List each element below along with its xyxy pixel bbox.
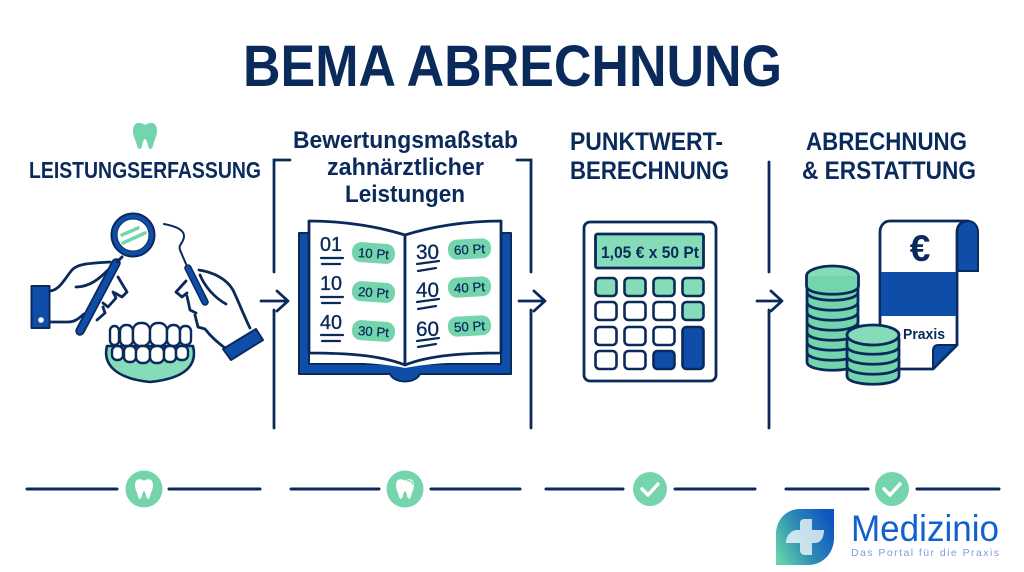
heading: Punktwert-Berechnung: PUNKTWERT- [570, 128, 723, 156]
left page [309, 221, 405, 365]
icon: top tooth [133, 123, 157, 149]
mirror handle [80, 257, 122, 331]
heading: Bewertungsmaßstab: zahnärztlicher [327, 154, 484, 181]
euro sign: € [910, 228, 930, 269]
icon: invoice with coins [806, 221, 978, 384]
point labels: 20 Pt [357, 284, 390, 301]
heading: Leistungserfassung: LEISTUNGSERFASSUNG [29, 157, 261, 183]
logo tagline: Das Portal für die Praxis [851, 547, 999, 559]
icon: calculator [584, 222, 716, 381]
point labels [357, 241, 486, 340]
invoice curl [957, 221, 978, 271]
left codes: 10 [320, 273, 342, 295]
probe [164, 224, 186, 264]
heading: Punktwert-Berechnung [570, 128, 729, 185]
right page [405, 221, 501, 365]
right cuff [223, 329, 263, 360]
page block [311, 354, 499, 368]
left codes: 01 [320, 234, 342, 256]
heading: Abrechnung und Erstattung [802, 128, 976, 185]
display text: 1,05 € x 50 Pt [601, 243, 699, 262]
column dividers [274, 160, 769, 428]
invoice sheet [880, 221, 968, 369]
probe handle [188, 268, 205, 302]
left hand [50, 262, 127, 322]
point labels: 10 Pt [357, 245, 390, 262]
heading: Bewertungsmaßstab [293, 127, 518, 208]
point labels: 40 Pt [454, 279, 486, 296]
teeth [110, 323, 191, 363]
step 1 timeline [27, 470, 260, 508]
step 3 timeline [546, 472, 755, 506]
right hand [176, 270, 250, 350]
heading: Punktwert-Berechnung: BERECHNUNG [570, 157, 729, 185]
heading: Abrechnung und Erstattung: & ERSTATTUNG [802, 157, 976, 185]
right codes: 40 [416, 279, 439, 302]
left cuff [32, 286, 50, 328]
mirror [112, 214, 154, 256]
folded corner [933, 345, 957, 369]
right codes: 30 [416, 241, 439, 264]
icon: open book [299, 221, 511, 382]
calculator display [596, 234, 704, 268]
point pills [351, 238, 491, 343]
arrow 3 [757, 291, 782, 311]
step 2 timeline [291, 470, 520, 508]
arrow 1 [261, 291, 288, 311]
large coin stack [806, 266, 858, 370]
gums [106, 346, 194, 382]
small coin stack [847, 325, 899, 384]
point labels: 60 Pt [454, 241, 486, 258]
logo mark [776, 509, 834, 565]
step 4 timeline [786, 472, 999, 506]
title: BEMA ABRECHNUNG [243, 34, 782, 99]
invoice label: Praxis [903, 326, 945, 343]
code underlines [321, 258, 439, 347]
logo name: Medizinio [851, 508, 999, 549]
arrow 2 [519, 291, 545, 311]
left codes: 40 [320, 312, 342, 334]
right codes: 60 [416, 318, 439, 341]
invoice band [881, 272, 956, 316]
point labels: 50 Pt [454, 318, 486, 335]
heading: Bewertungsmaßstab: Bewertungsmaßstab [293, 127, 518, 154]
calculator keys [596, 278, 704, 369]
book cover [299, 233, 511, 382]
heading: Abrechnung und Erstattung: ABRECHNUNG [806, 128, 967, 156]
right codes [416, 241, 439, 341]
heading: Bewertungsmaßstab: Leistungen [345, 181, 465, 208]
calculator body [584, 222, 716, 381]
left codes [320, 234, 342, 334]
point labels: 30 Pt [357, 323, 390, 340]
icon: dental examination [32, 214, 263, 382]
